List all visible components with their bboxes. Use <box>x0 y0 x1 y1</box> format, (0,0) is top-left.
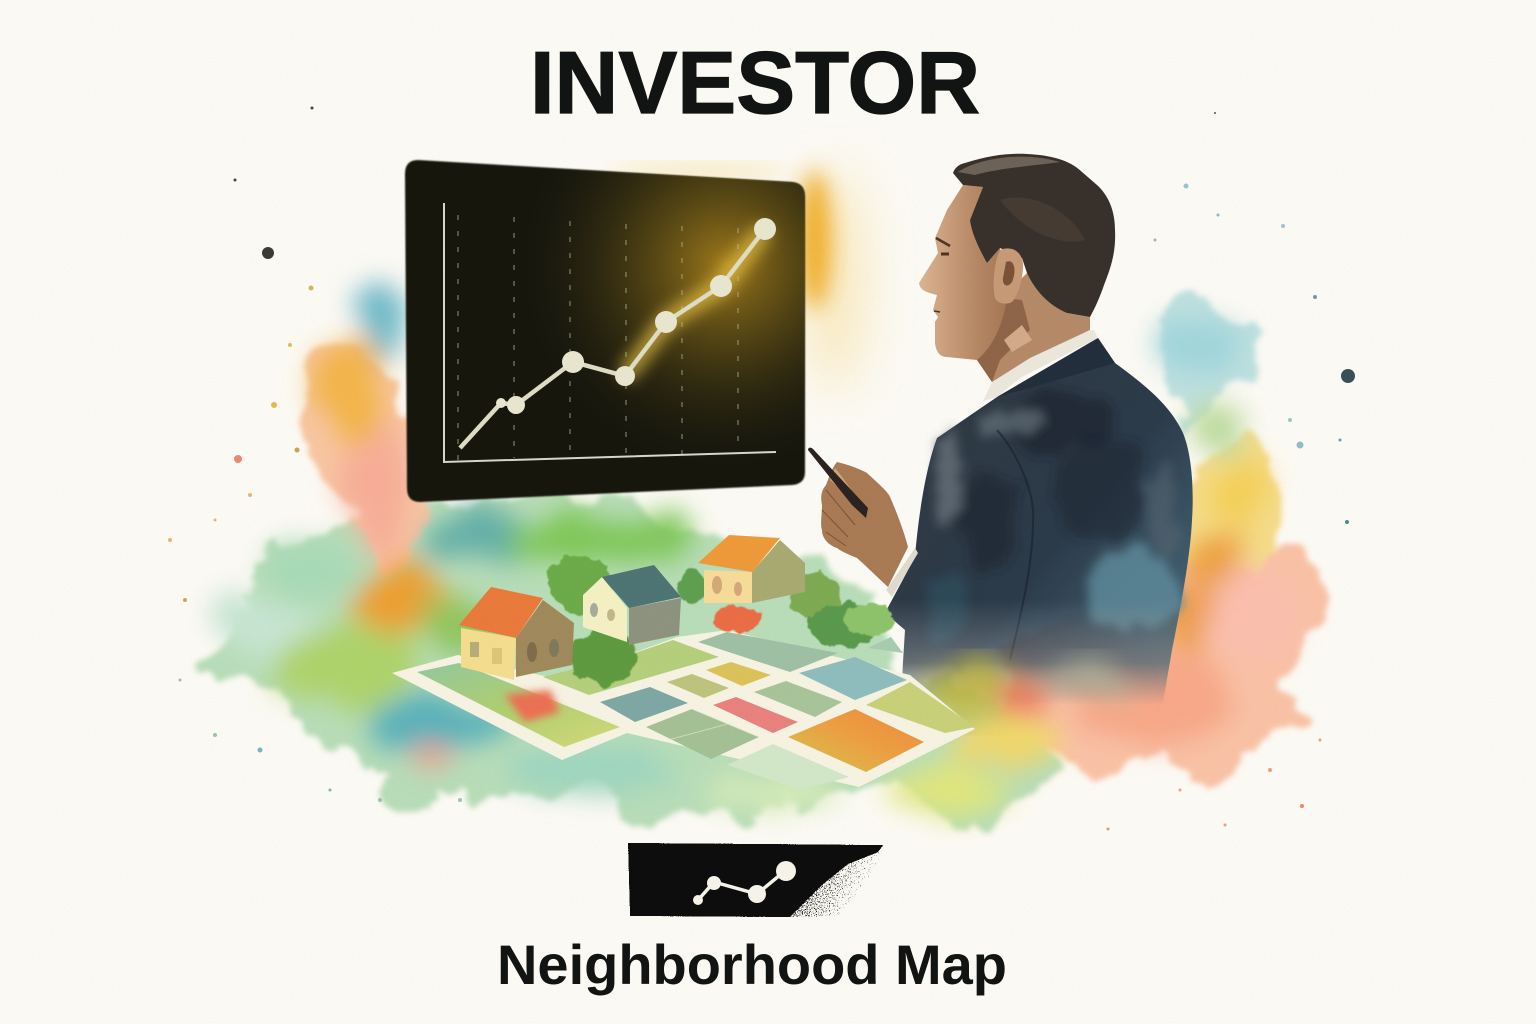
chalkboard chart panel <box>405 160 805 502</box>
map cells <box>417 632 975 790</box>
ink banner <box>628 843 883 917</box>
shirt collar <box>983 330 1098 401</box>
house: orange roof <box>459 587 574 680</box>
neck <box>977 273 1090 382</box>
trend line <box>460 218 776 448</box>
wash blending over suit bottom <box>923 668 1132 716</box>
axes <box>444 203 776 462</box>
subtitle: Neighborhood Map <box>497 933 1007 996</box>
green shrubs <box>549 555 896 685</box>
icon: rising line chart <box>693 861 796 905</box>
face <box>919 185 1008 360</box>
hand <box>821 462 908 587</box>
trend line glow <box>625 229 765 376</box>
house: slate roof <box>583 565 681 645</box>
ear <box>994 248 1023 304</box>
dashed gridlines <box>458 215 738 460</box>
collar of jacket <box>997 338 1115 397</box>
investor figure <box>808 154 1193 720</box>
black ink banner with chart icon <box>628 843 883 917</box>
shirt cuff <box>886 548 918 597</box>
map base <box>392 630 975 787</box>
watercolor wash background <box>205 275 1330 830</box>
board glow <box>610 166 865 390</box>
sleeve seam <box>997 430 1033 660</box>
jacket <box>885 338 1193 720</box>
paint splatter dots <box>168 106 1355 830</box>
eye and brow <box>934 238 950 312</box>
hair <box>953 154 1115 317</box>
house: orange roof far <box>698 535 805 603</box>
neighborhood map <box>392 535 975 790</box>
title: INVESTOR <box>530 33 980 132</box>
red flowers <box>718 608 758 632</box>
board <box>405 160 805 502</box>
pen <box>808 448 868 518</box>
